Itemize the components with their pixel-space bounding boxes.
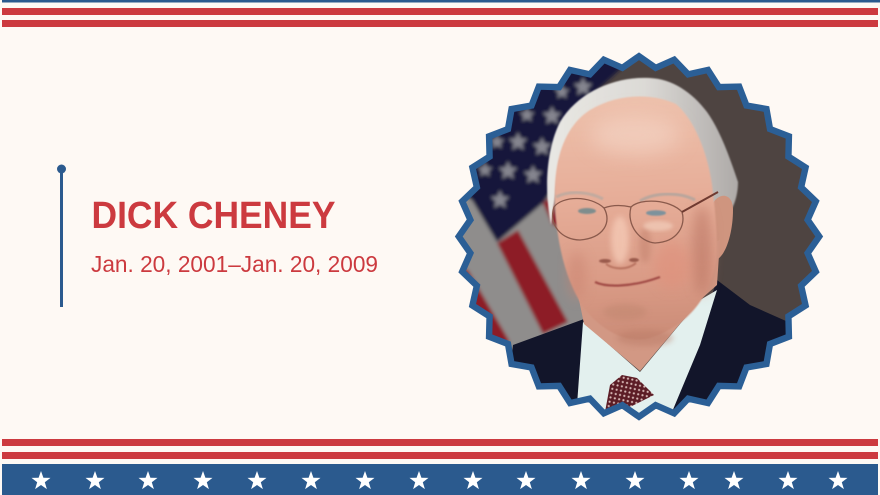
nose — [599, 258, 639, 268]
neck — [579, 256, 719, 371]
bottom star band — [2, 464, 878, 495]
row of white stars — [32, 471, 848, 489]
term dates: Jan. 20, 2001–Jan. 20, 2009 — [91, 251, 378, 277]
hair — [547, 78, 738, 225]
portrait photo — [462, 60, 816, 412]
brown studio backdrop — [512, 60, 816, 372]
title: DICK CHENEY — [92, 195, 336, 237]
eyebrows and eyes — [556, 193, 695, 231]
ear — [712, 196, 733, 260]
vertical accent line with dot — [57, 164, 66, 307]
starburst outline — [459, 56, 819, 417]
facial shading — [568, 115, 712, 346]
portrait in starburst frame — [454, 52, 824, 421]
suit jacket — [512, 280, 786, 410]
shirt — [577, 290, 717, 425]
bottom stripes — [2, 439, 878, 459]
face — [555, 96, 717, 340]
mouth — [595, 277, 660, 286]
top stripes — [2, 0, 880, 27]
american flag — [462, 64, 622, 350]
glasses — [553, 192, 718, 243]
necktie — [605, 375, 654, 412]
flag stars — [477, 77, 592, 208]
